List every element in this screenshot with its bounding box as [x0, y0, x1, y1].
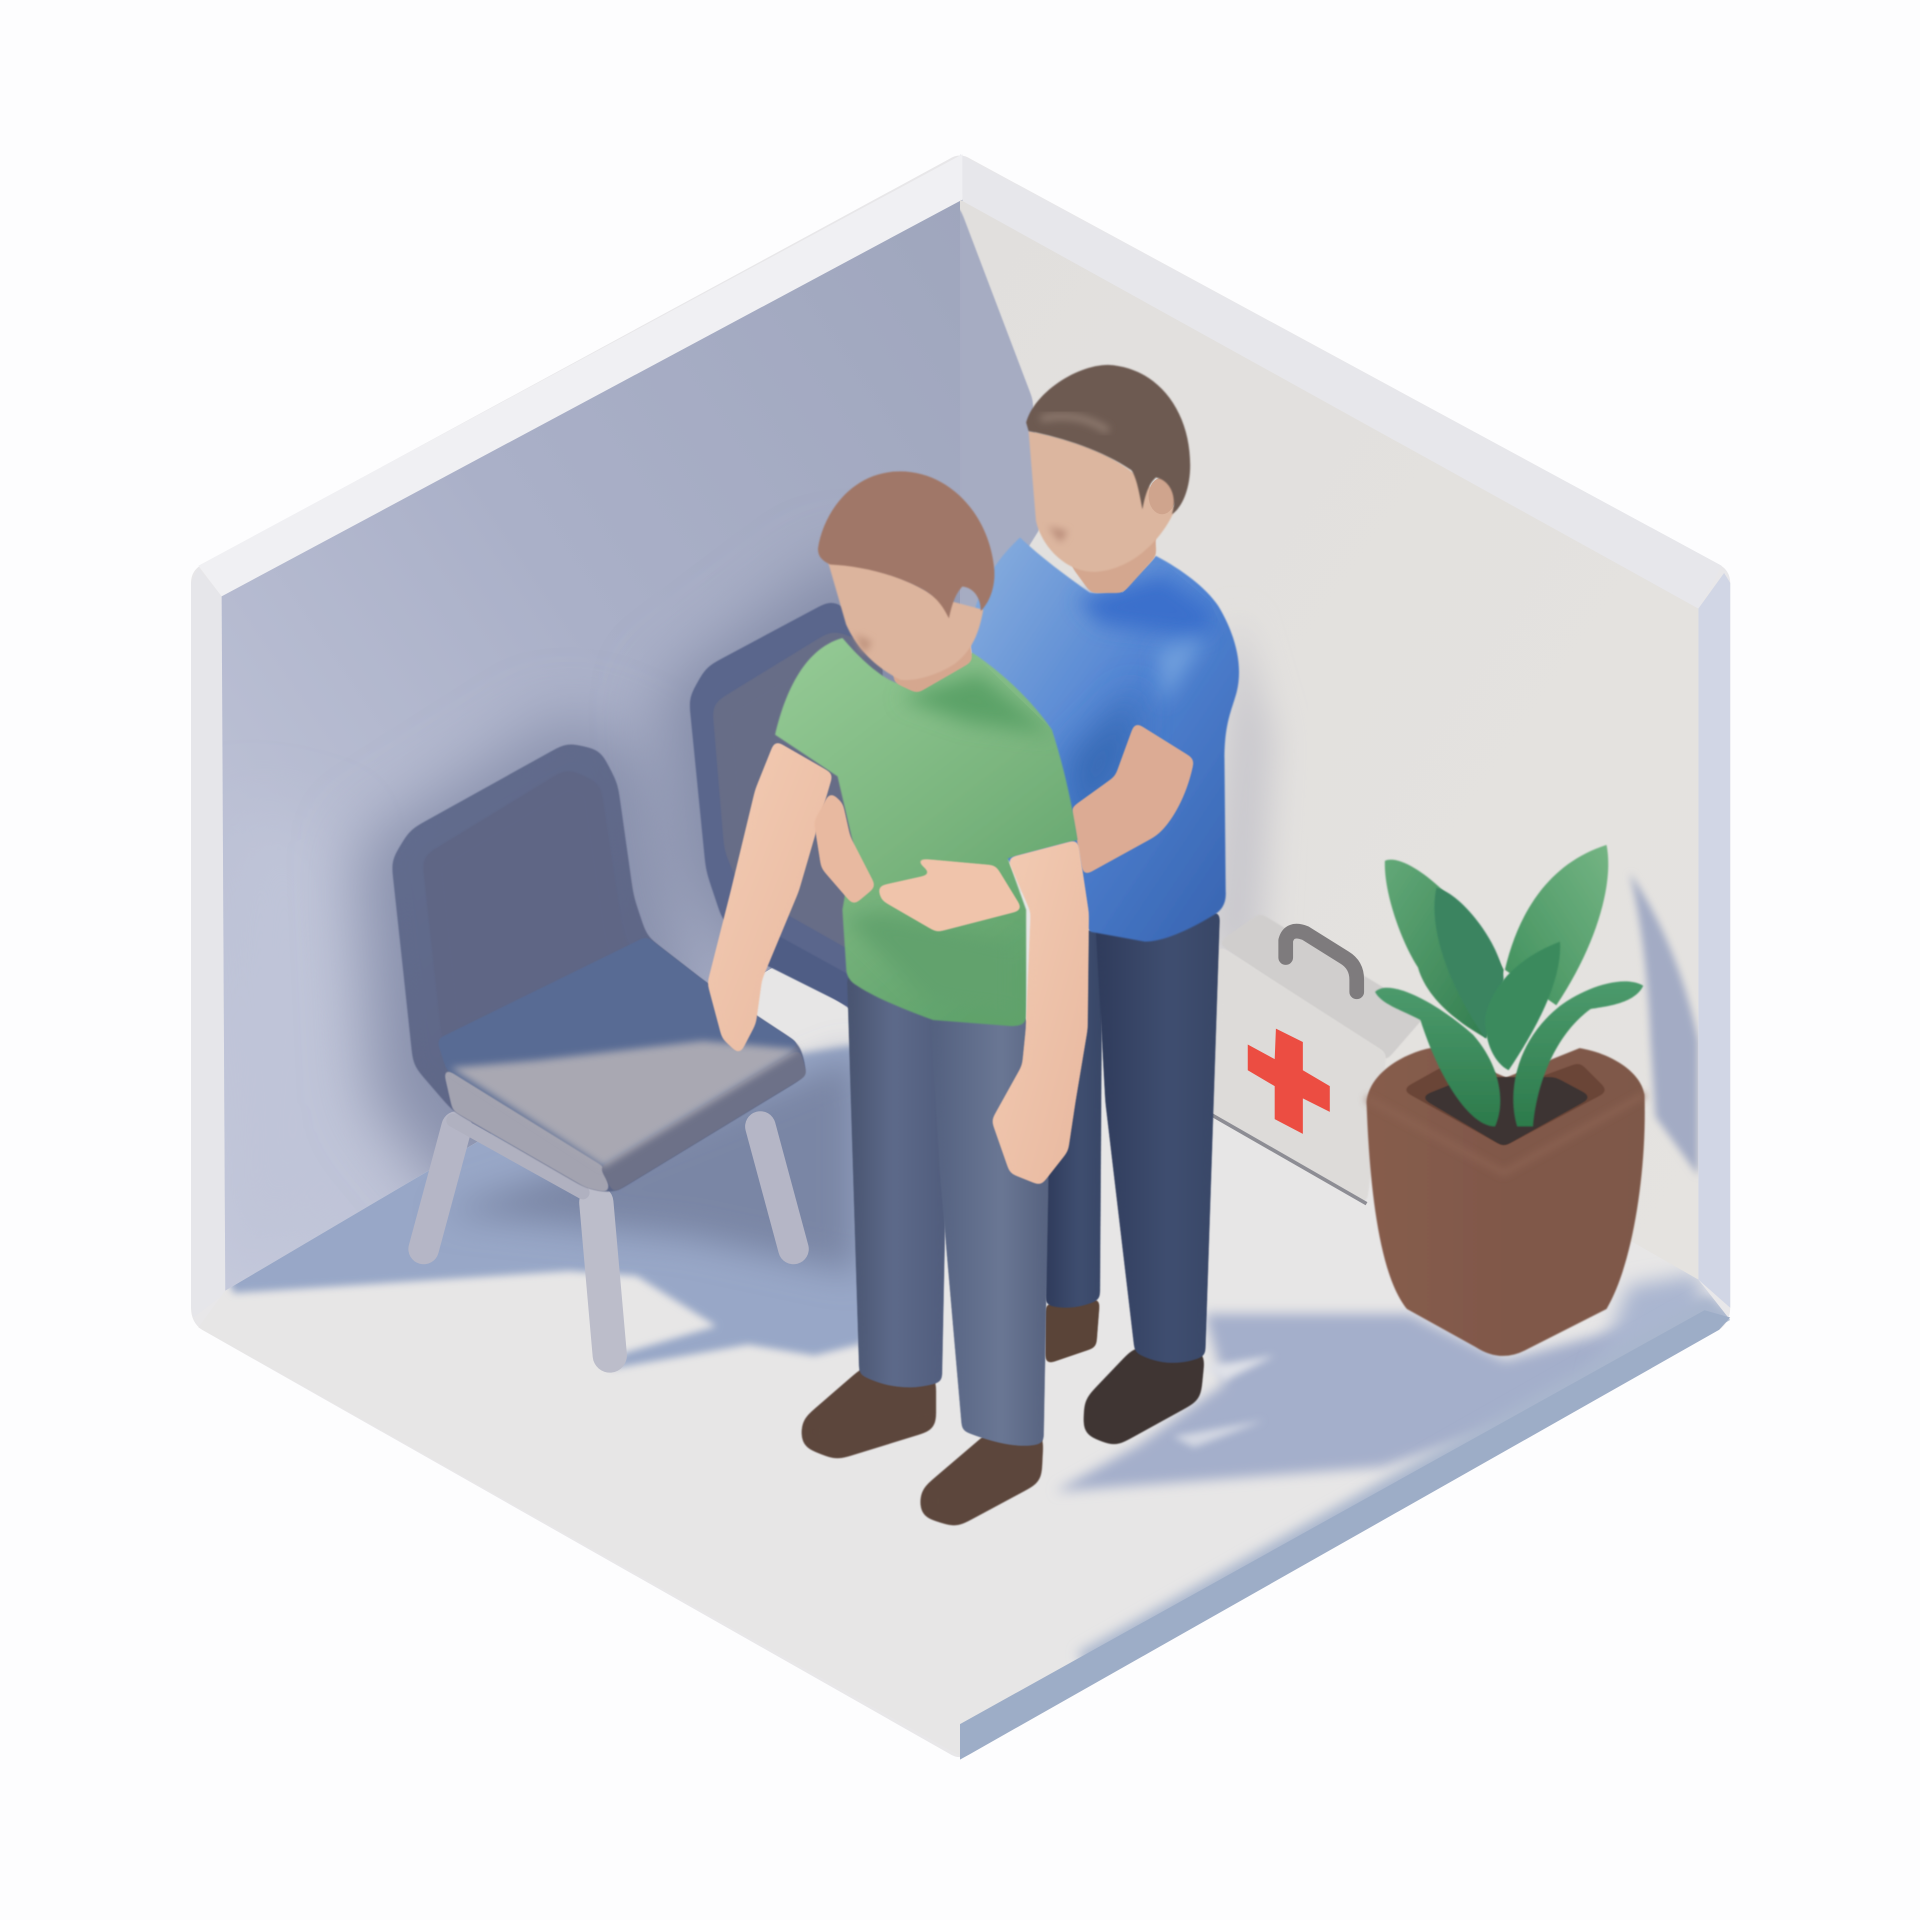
front right bevel [960, 1310, 1730, 1760]
chair seat side right [600, 1049, 807, 1193]
rescuer hair [1026, 365, 1190, 514]
torso [775, 638, 1078, 1026]
pot [1367, 1047, 1645, 1356]
corner shadow on right wall [960, 209, 1039, 608]
shoes [802, 1365, 936, 1460]
kit handle [1286, 931, 1357, 992]
illustration: isometric first aid room [191, 154, 1730, 1760]
chair seat shaded rear [437, 937, 800, 1167]
chair seat lit front [451, 1041, 800, 1167]
rescuer head [1029, 431, 1176, 572]
shadow cast by figures and plant [1056, 1298, 1714, 1491]
first aid kit [1209, 913, 1427, 1204]
rescuer right hand on abdomen [878, 858, 1022, 932]
soft inner edge of bevel [1078, 1298, 1739, 1696]
rescuer ear [1149, 478, 1176, 514]
nose shadow [855, 634, 872, 654]
rescuer torso [969, 538, 1239, 942]
rescuer left hand on abdomen [814, 792, 876, 905]
chair legs [424, 1120, 793, 1356]
shadow beneath chairs [225, 1041, 882, 1369]
red cross [1248, 1029, 1330, 1134]
chair seat side left [443, 1068, 610, 1193]
kit body [1209, 945, 1386, 1204]
choking person in green shirt [708, 471, 1089, 1527]
rescuer in blue shirt [969, 365, 1239, 1446]
right arm [992, 840, 1089, 1185]
left wall [220, 200, 962, 1293]
floor [198, 968, 1730, 1760]
chair in foreground [392, 743, 807, 1356]
potted plant [1367, 845, 1645, 1356]
room shell: outer hexagon rim [191, 154, 1730, 1757]
plant shadow on right wall [1630, 873, 1698, 1176]
chair behind figures [689, 600, 882, 1029]
leaves [1375, 845, 1643, 1127]
pot rim shading [1402, 1063, 1608, 1146]
chair back [392, 743, 807, 1193]
kit top [1218, 913, 1427, 1060]
hair [818, 471, 994, 618]
soil [1420, 1078, 1592, 1146]
head [828, 561, 983, 680]
rescuer neck [1071, 527, 1156, 593]
shadow beside right wall [1603, 1267, 1710, 1334]
rescuer trousers [1046, 912, 1220, 1363]
right wall [955, 196, 1698, 1286]
rescuer right arm [1071, 722, 1194, 876]
left arm [708, 741, 833, 1054]
neck [894, 624, 972, 693]
rescuer nose shadow [1048, 527, 1068, 542]
trousers [847, 973, 1048, 1445]
rescuer shoes [1046, 1299, 1100, 1364]
